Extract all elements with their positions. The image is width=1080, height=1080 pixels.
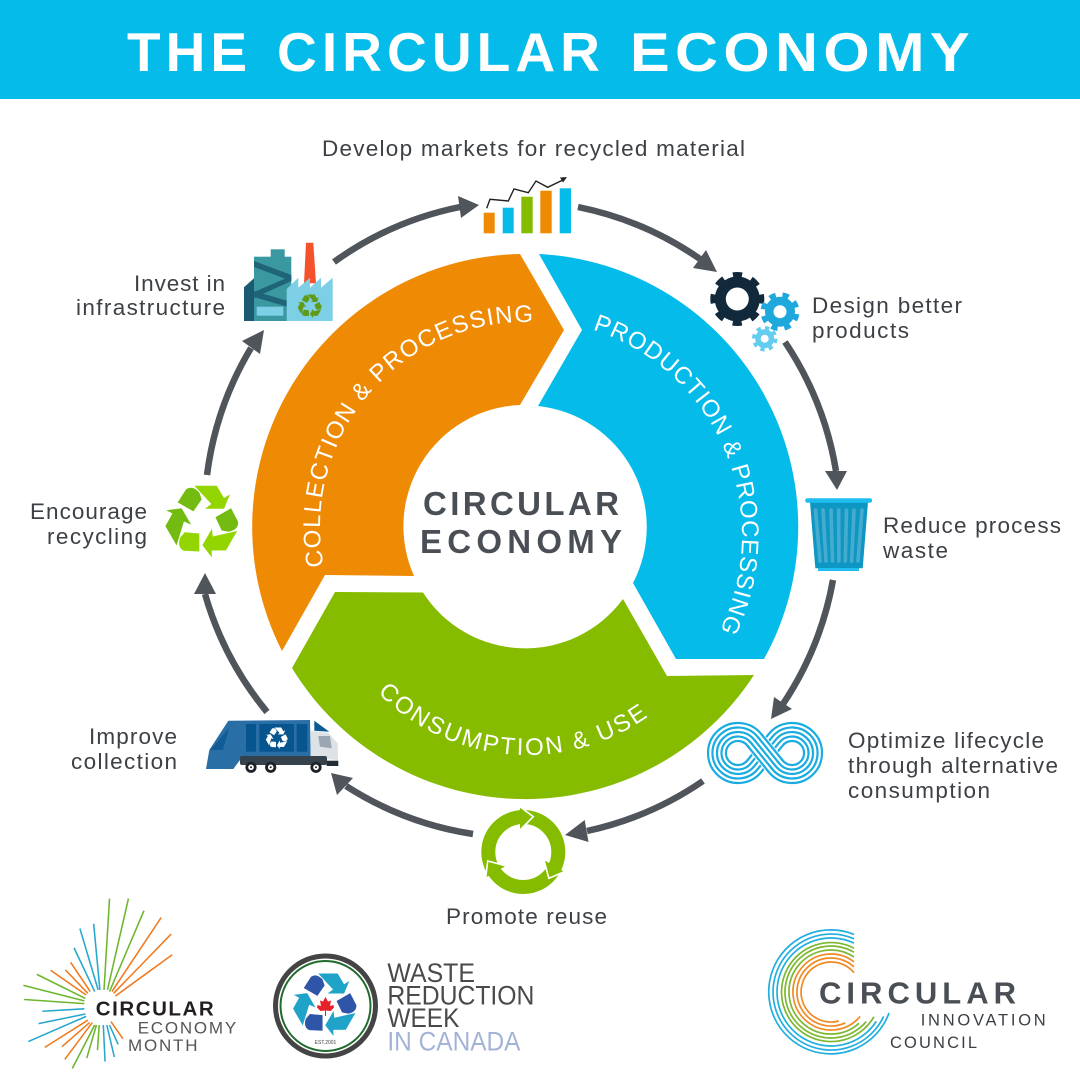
label: optimize lifecycle: Optimize lifecycle (848, 728, 1044, 753)
panel: collection and processing segment: COLLECTION & PROCESSING (303, 305, 532, 566)
label: develop markets: Develop markets for recycled material (322, 136, 745, 161)
label: encourage recycling: Encourage (30, 499, 147, 524)
title banner (0, 0, 1080, 99)
panel: production and processing segment (538, 254, 798, 659)
arrow: markets to design (578, 207, 717, 272)
logo: Waste Reduction Week in Canada: IN CANADA (387, 1026, 520, 1056)
panel: collection and processing segment (252, 254, 564, 651)
icon: bar chart with rising line (484, 177, 571, 233)
logo: Waste Reduction Week in Canada: WASTE (387, 958, 475, 988)
label: design better products (812, 293, 962, 343)
logo: Waste Reduction Week in Canada: EST.2001 (315, 1040, 337, 1046)
label: design better products: products (812, 318, 909, 343)
logo: Waste Reduction Week in Canada (276, 956, 534, 1056)
label: encourage recycling (30, 499, 147, 549)
icon: reuse circular arrows (479, 807, 564, 887)
logo: Waste Reduction Week in Canada: REDUCTION (387, 981, 534, 1011)
logo: Waste Reduction Week in Canada: WEEK (387, 1003, 459, 1033)
label: reduce process waste (882, 513, 1061, 563)
panel: production and processing segment: PRODUCTION & PROCESSING (594, 314, 759, 634)
centre heading: CIRCULAR (423, 485, 619, 522)
logo: Circular Innovation Council (769, 930, 1046, 1054)
icon: gears (709, 271, 799, 350)
icon: green recycling symbol (159, 486, 246, 562)
label: optimize lifecycle: consumption (848, 778, 990, 803)
title banner: ECONOMY (630, 21, 975, 83)
sunburst rays (23, 899, 172, 1068)
arrow: collection to recycling (194, 573, 267, 712)
label: invest in infrastructure (76, 271, 225, 320)
centre heading: ECONOMY (420, 523, 622, 560)
arrow: recycling to infrastructure (207, 330, 264, 475)
label: improve collection: Improve (89, 724, 177, 749)
label: optimize lifecycle (848, 728, 1058, 803)
label: reduce process waste: waste (882, 538, 948, 563)
logo: Circular Economy Month: CIRCULAR (96, 998, 214, 1021)
arrow: reuse to collection (331, 773, 473, 834)
label: invest in infrastructure: infrastructure (76, 295, 225, 320)
logo: Circular Innovation Council: COUNCIL (890, 1034, 977, 1052)
label: invest in infrastructure: Invest in (134, 271, 225, 296)
logo: Circular Economy Month: ECONOMY (138, 1019, 236, 1038)
logo: Circular Innovation Council: INNOVATION (921, 1012, 1046, 1030)
title banner: CIRCULAR (277, 21, 605, 83)
concentric C rings (769, 930, 889, 1054)
label: design better products: Design better (812, 293, 962, 318)
arrow: infrastructure to markets (334, 196, 479, 262)
centre heading (420, 485, 622, 560)
panel: consumption and use segment (292, 592, 754, 800)
arrow: lifecycle to reuse (565, 781, 703, 842)
label: encourage recycling: recycling (47, 524, 147, 549)
icon: infinity loop (708, 723, 822, 783)
label: promote reuse: Promote reuse (446, 904, 607, 929)
label: reduce process waste: Reduce process (883, 513, 1061, 538)
label: improve collection (71, 724, 177, 774)
title banner: THE (127, 21, 252, 83)
logo: Circular Economy Month (23, 899, 236, 1068)
arrow: design to process waste (785, 342, 847, 490)
label: optimize lifecycle: through alternative (848, 753, 1058, 778)
icon: recycling factory (244, 243, 333, 321)
label: improve collection: collection (71, 749, 177, 774)
icon: waste bin (805, 498, 872, 571)
panel: consumption and use segment: CONSUMPTION & USE (381, 684, 648, 756)
arrow: process waste to lifecycle (771, 580, 833, 719)
logo: Circular Innovation Council: CIRCULAR (819, 975, 1016, 1010)
logo: Circular Economy Month: MONTH (128, 1036, 198, 1055)
icon: recycling truck (206, 720, 338, 773)
